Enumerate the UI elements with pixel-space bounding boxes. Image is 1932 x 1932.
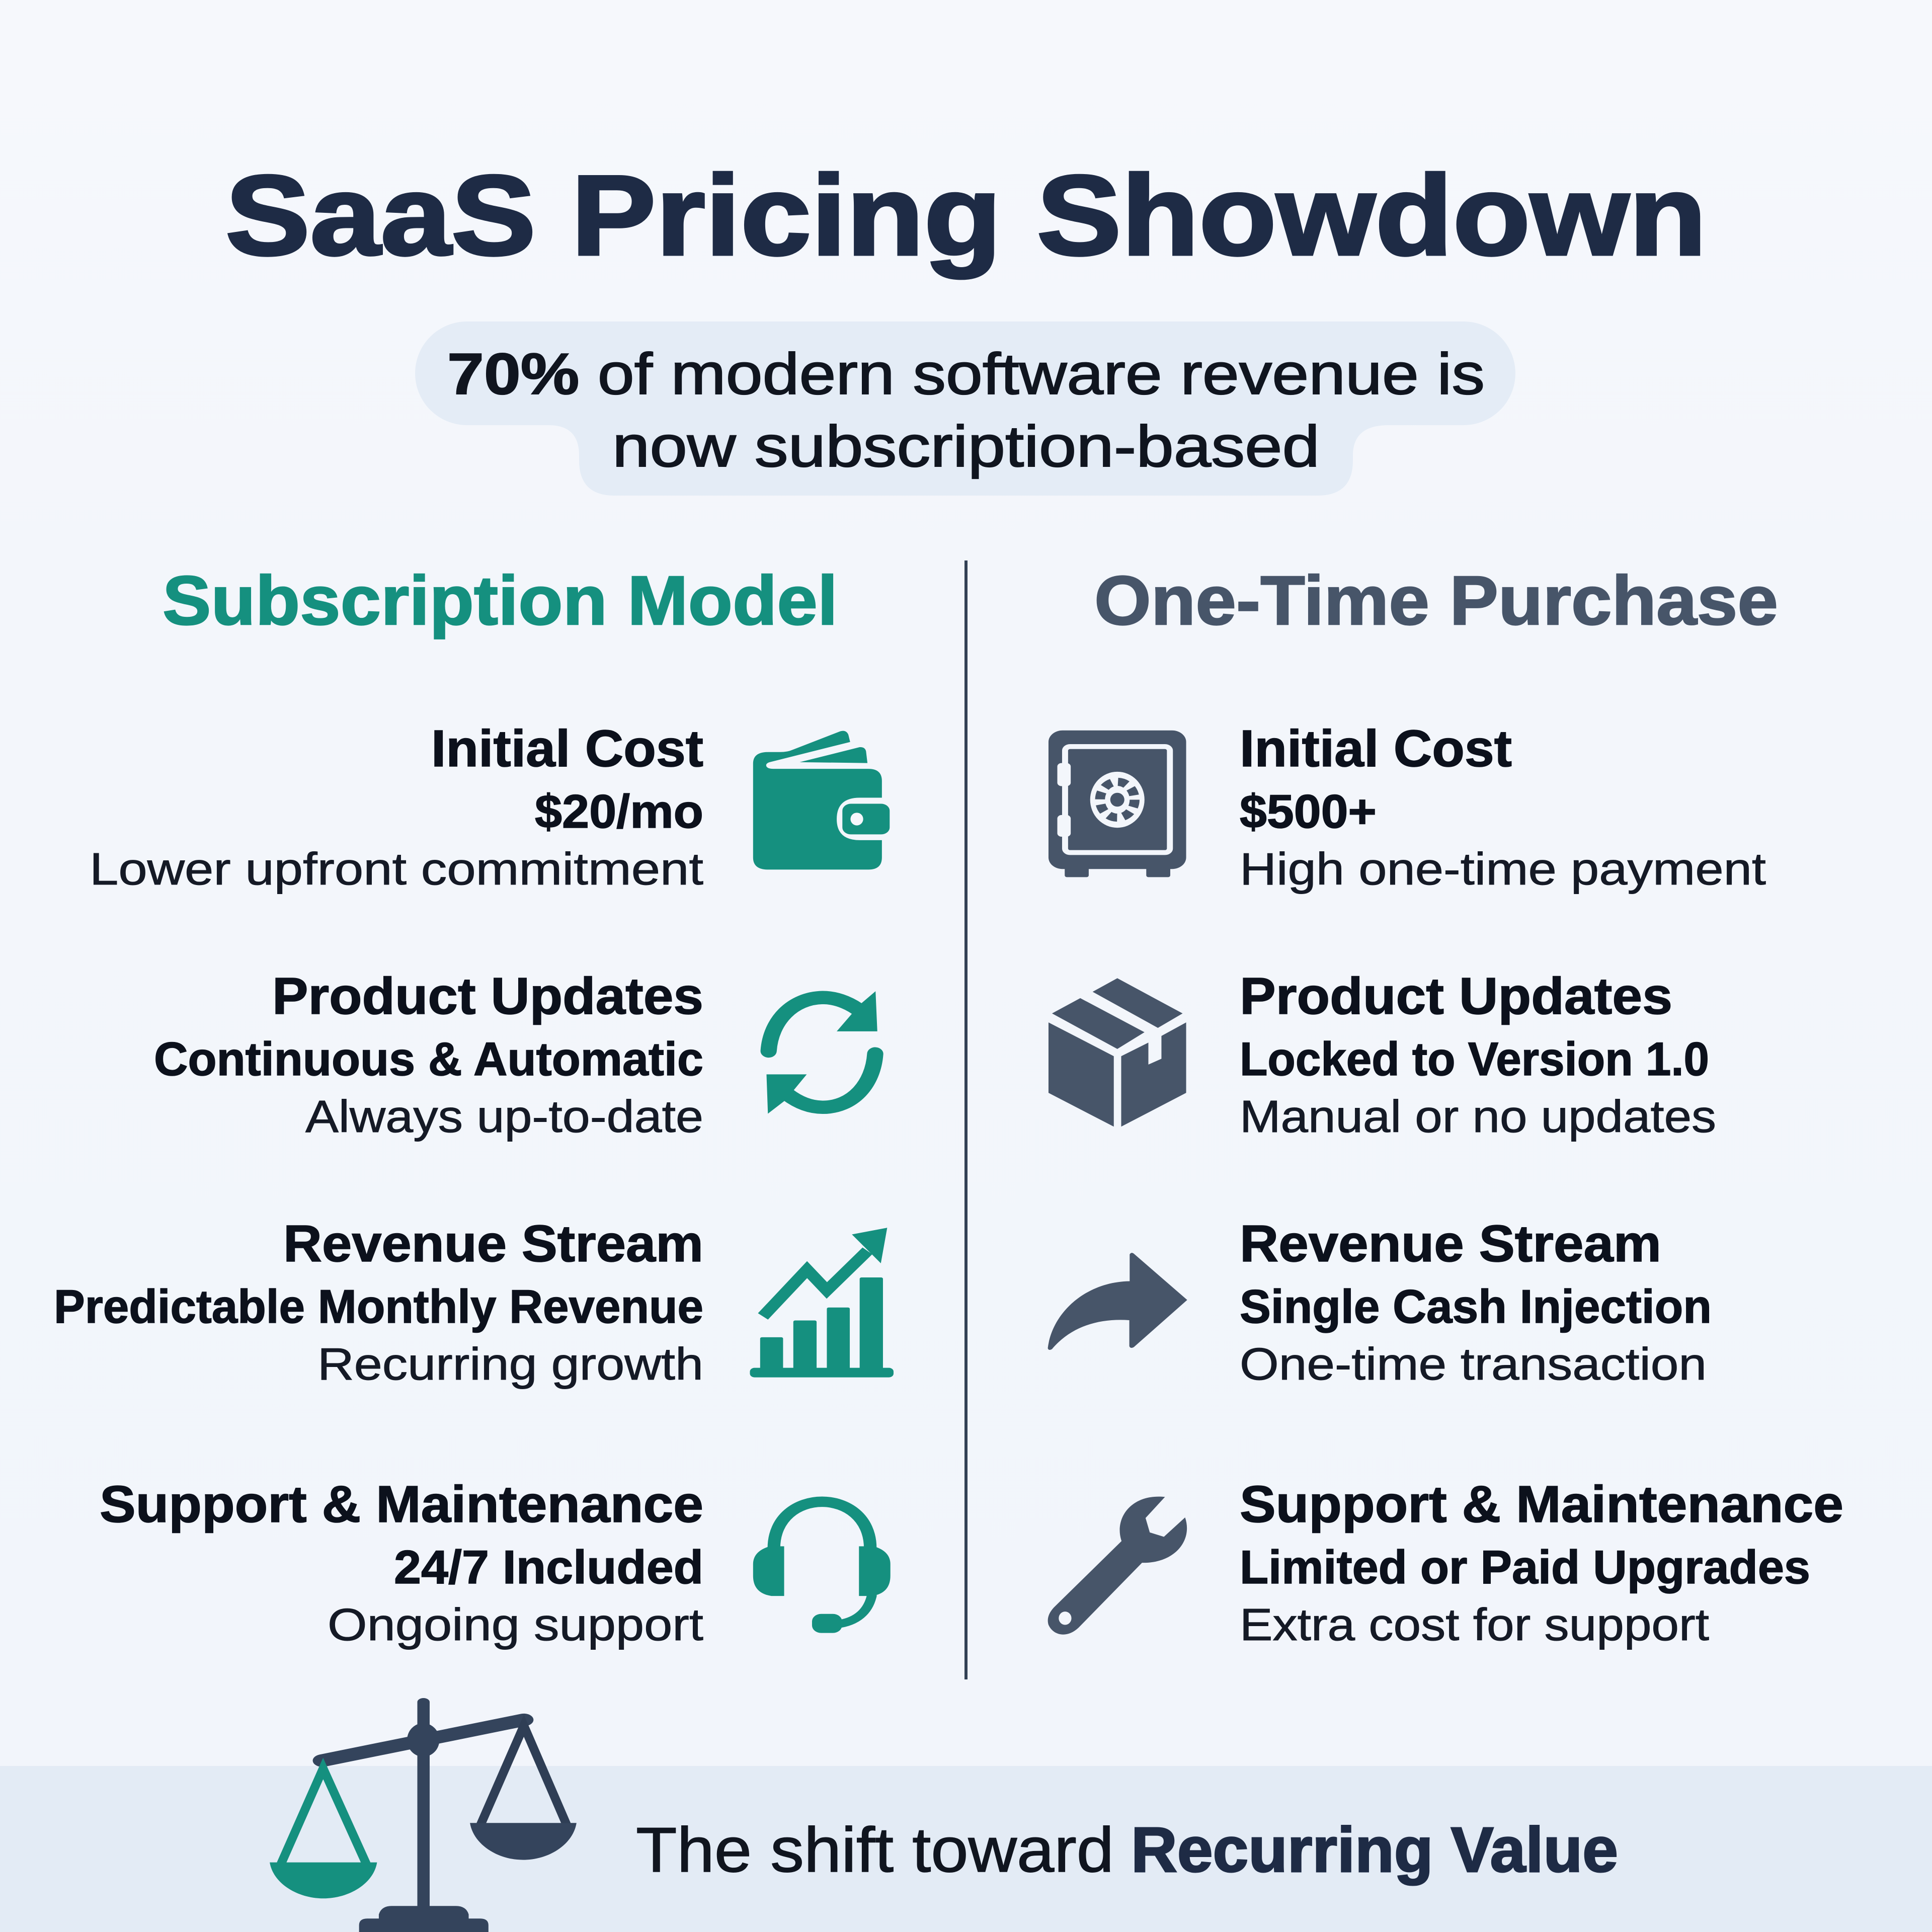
- row: one-time initial cost: Initial Cost: [1240, 719, 1512, 777]
- title: SaaS Pricing Showdown: [225, 151, 1707, 279]
- row: one-time product updates: Manual or no updates: [1240, 1092, 1716, 1142]
- row: subscription support: [100, 1475, 703, 1650]
- subtitle line 1: 70% of modern software revenue is: [447, 341, 1485, 407]
- icon: refresh arrows: [766, 991, 877, 1113]
- icon: wallet: [753, 731, 890, 869]
- icon: wrench: [1048, 1497, 1187, 1635]
- row: subscription support: Ongoing support: [328, 1600, 703, 1650]
- row: one-time revenue stream: One-time transaction: [1240, 1339, 1707, 1390]
- heading: Subscription Model: Subscription Model: [163, 562, 838, 639]
- row: one-time initial cost: [1240, 719, 1766, 895]
- row: one-time product updates: [1240, 967, 1716, 1142]
- row: one-time product updates: Locked to Version 1.0: [1240, 1032, 1709, 1085]
- row: subscription product updates: Product Updates: [272, 967, 703, 1025]
- icon: growth chart: [750, 1228, 894, 1378]
- row: subscription initial cost: [90, 719, 703, 895]
- icon: curved arrow: [1048, 1253, 1187, 1350]
- footer band: [0, 1766, 1932, 1932]
- row: subscription product updates: [154, 967, 703, 1142]
- row: one-time support: Limited or Paid Upgrades: [1240, 1541, 1810, 1593]
- panel: one-time purchase: [1048, 719, 1843, 1650]
- panel: subscription model: [54, 719, 894, 1650]
- row: subscription revenue stream: Revenue Stream: [283, 1215, 703, 1272]
- row: subscription product updates: Always up-to-date: [305, 1092, 703, 1142]
- row: subscription product updates: Continuous & Automatic: [154, 1032, 703, 1085]
- subtitle line 2: now subscription-based: [612, 414, 1320, 479]
- row: subscription initial cost: Lower upfront commitment: [90, 844, 703, 895]
- subtitle callout: [415, 321, 1515, 496]
- row: one-time support: Extra cost for support: [1240, 1600, 1709, 1650]
- row: one-time initial cost: $500+: [1240, 785, 1377, 838]
- footer text: The shift toward: [636, 1814, 1114, 1885]
- row: subscription initial cost: $20/mo: [535, 785, 703, 838]
- row: subscription support: 24/7 Included: [394, 1541, 703, 1593]
- row: subscription revenue stream: Predictable Monthly Revenue: [54, 1280, 703, 1333]
- row: one-time revenue stream: [1240, 1215, 1712, 1390]
- row: subscription support: Support & Maintenance: [100, 1475, 703, 1533]
- heading: One-Time Purchase: One-Time Purchase: [1094, 562, 1778, 639]
- icon: headset: [753, 1502, 891, 1633]
- row: one-time revenue stream: Revenue Stream: [1240, 1215, 1661, 1272]
- row: one-time revenue stream: Single Cash Injection: [1240, 1280, 1712, 1333]
- row: one-time initial cost: High one-time payment: [1240, 844, 1766, 895]
- row: one-time support: Support & Maintenance: [1240, 1475, 1843, 1533]
- row: one-time product updates: Product Updates: [1240, 967, 1672, 1025]
- icon: balance scale: [270, 1698, 577, 1932]
- row: one-time support: [1240, 1475, 1843, 1650]
- icon: box: [1049, 978, 1186, 1126]
- row: subscription revenue stream: Recurring growth: [317, 1339, 703, 1390]
- footer background: [0, 1766, 1932, 1932]
- row: subscription initial cost: Initial Cost: [431, 719, 703, 777]
- subtitle pill background: [415, 321, 1515, 496]
- footer emphasis: Recurring Value: [1131, 1814, 1618, 1885]
- icon: safe: [1049, 731, 1186, 877]
- row: subscription revenue stream: [54, 1215, 703, 1390]
